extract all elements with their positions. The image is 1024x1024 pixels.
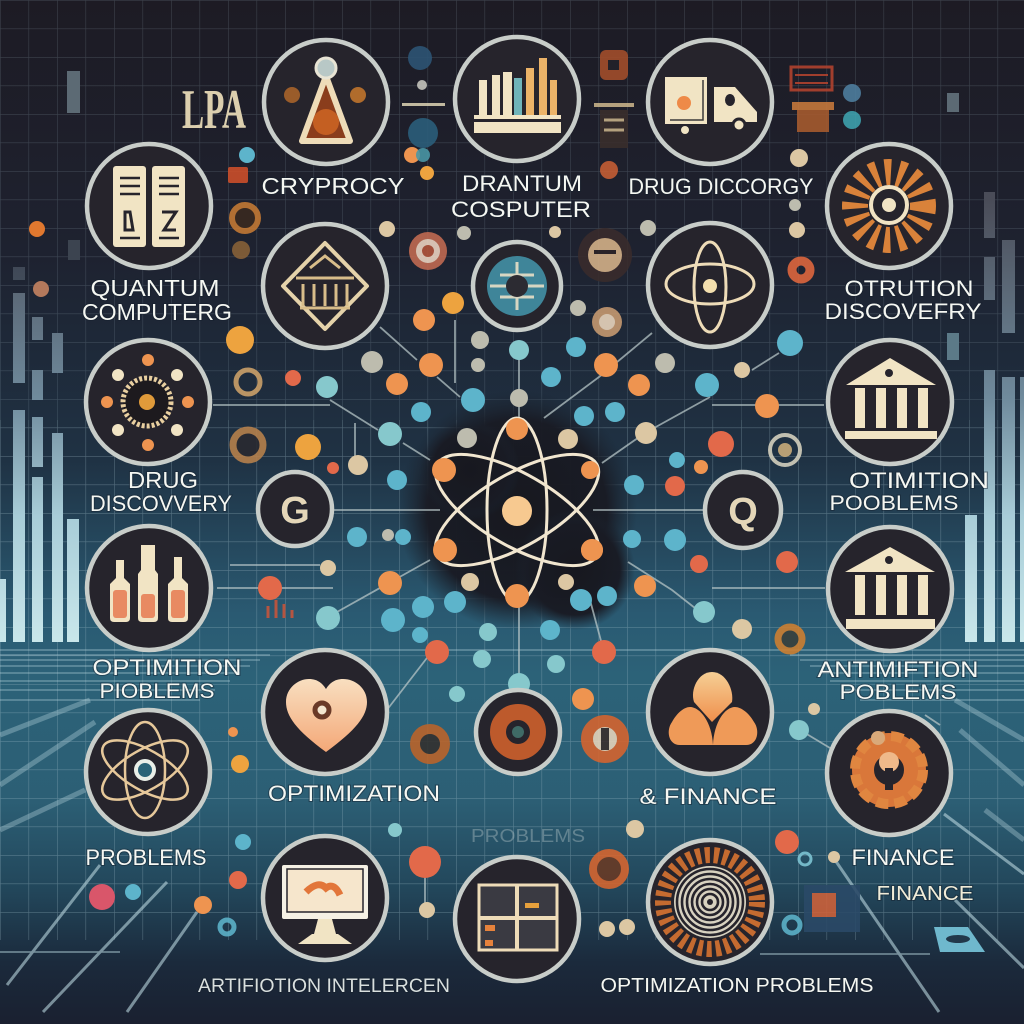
- panel: small right badge: Q: [728, 491, 758, 533]
- panel: top bar chart: [455, 37, 579, 161]
- label: optimition pioblems: [92, 655, 242, 703]
- label: antimiftion poblems: POBLEMS: [840, 681, 956, 704]
- label: otimition poblems: POOBLEMS: [830, 492, 958, 515]
- label: optimition pioblems: PIOBLEMS: [100, 680, 214, 703]
- panel: small flower: [476, 690, 560, 774]
- label: quantum computer top: COSPUTER: [451, 197, 591, 222]
- label: drug discovery left: DISCOVVERY: [90, 491, 232, 516]
- panel: grid table: [455, 857, 579, 981]
- small decorative icons: [220, 46, 861, 934]
- panel: small left badge: G: [280, 490, 310, 532]
- label: otimition poblems: [830, 468, 989, 515]
- label: quantum computer top: [451, 171, 591, 222]
- label: top corner: LPA: [182, 79, 246, 141]
- panel: orbit atom: [648, 223, 772, 347]
- label: drug discovery left: [90, 467, 232, 516]
- label: finance: FINANCE: [852, 845, 954, 870]
- panel: shield emblem: [263, 224, 387, 348]
- label: drug discovery top: DRUG DICCORGY: [628, 174, 814, 199]
- panel: small right badge: [705, 472, 781, 548]
- label: quantum computers left: [82, 275, 232, 325]
- perspective streaks: [0, 700, 1024, 1012]
- panel: bank upper: [828, 340, 952, 464]
- label: quantum computer top: DRANTUM: [462, 171, 582, 196]
- label: optimization problems: OPTIMIZATION PROBLEMS: [600, 975, 874, 997]
- label: finance small: FINANCE: [876, 883, 974, 905]
- panel: top right truck: [648, 40, 772, 164]
- label: cryptography: CRYPROCY: [262, 173, 404, 199]
- label: antimiftion poblems: ANTIMIFTION: [818, 657, 978, 682]
- panel: molecule burst: [86, 340, 210, 464]
- bottom right teal tag: [934, 927, 985, 952]
- side bars left: [0, 71, 80, 642]
- label: quantum computers left: COMPUTERG: [82, 299, 232, 325]
- label: otimition poblems: OTIMITION: [849, 468, 989, 493]
- label: quantum computers left: QUANTUM: [90, 275, 220, 301]
- panel: quantum computer: [87, 144, 211, 268]
- label: antimiftion poblems: [818, 657, 978, 704]
- atom hub: [419, 418, 615, 608]
- side bars right: [947, 93, 1024, 642]
- label: otrution discovery: [824, 276, 982, 324]
- panel: spiral fingerprint: [648, 840, 772, 964]
- panel: sunburst: [827, 144, 951, 268]
- label: otrution discovery: DISCOVEFRY: [824, 299, 982, 324]
- label: optimization: OPTIMIZATION: [268, 781, 440, 806]
- panel: top left cryptography: [264, 40, 388, 164]
- panel: small left badge: [258, 472, 332, 546]
- panel: keyhole gear: [827, 711, 951, 835]
- label: drug discovery left: DRUG: [128, 467, 198, 493]
- central dark blob: [397, 390, 637, 630]
- label: artificial intelligence: ARTIFIOTION INTELERCEN: [198, 976, 450, 997]
- panel: small circuit: [473, 242, 561, 330]
- label: problems: PROBLEMS: [86, 845, 206, 870]
- panel: flasks: [87, 526, 211, 650]
- panel: heart: [263, 650, 387, 774]
- connector lines: [213, 320, 940, 910]
- label: optimition pioblems: OPTIMITION: [92, 655, 242, 680]
- node dots: [29, 147, 840, 937]
- label: and finance: & FINANCE: [640, 784, 776, 809]
- label: faint problems: PROBLEMS: [471, 826, 585, 846]
- panel: atom left: [86, 710, 210, 834]
- label: otrution discovery: OTRUTION: [844, 276, 974, 301]
- panel: three petals: [648, 650, 772, 774]
- panel: bank lower: [828, 527, 952, 651]
- panel: monitor: [263, 836, 387, 960]
